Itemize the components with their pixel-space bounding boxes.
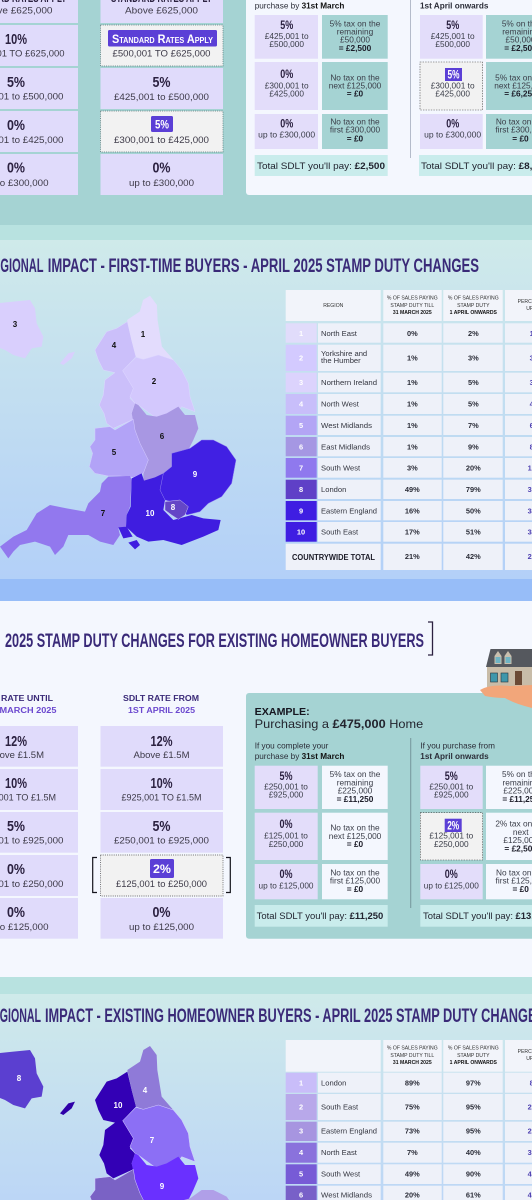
row text: 4 — [299, 1148, 304, 1157]
row text: 3% — [468, 354, 479, 362]
pill: standard rates apply: Standard Rates Apply — [112, 32, 214, 46]
row text: 3 — [299, 378, 303, 387]
row text: East Midlands — [321, 442, 370, 451]
row text: North East — [321, 329, 358, 338]
example column: from 1st April: 5% — [445, 769, 458, 783]
section background: homeowner rates — [0, 601, 532, 977]
example column: by 31st March: = £2,500 — [339, 43, 372, 53]
row text: South West — [321, 464, 361, 473]
example column: from 1st April: £925,000 — [434, 790, 469, 800]
row text: 51% — [466, 528, 481, 536]
example column: by 31st March: = £0 — [347, 884, 364, 894]
row text: 17% — [405, 528, 420, 536]
map labels: 9 — [160, 1182, 165, 1191]
rate column: first-time buyers from 1 April — [100, 0, 223, 195]
row text: 6 — [299, 442, 303, 451]
example column: by 31st March: = £0 — [347, 839, 364, 849]
row text: Northern Ireland — [321, 378, 377, 387]
table header: % OF SALES PAYING — [448, 1046, 499, 1052]
rate column: homeowners from 1 April: SDLT RATE FROM — [123, 693, 199, 703]
example column: by 31st March: first £300,000 — [330, 125, 381, 135]
example column: by 31st March: up to £125,000 — [258, 880, 314, 890]
rate column: homeowners until 31 March: 0% — [7, 904, 25, 921]
row text: 7 — [299, 464, 303, 473]
row text: 9% — [468, 442, 479, 451]
example column: by 31st March: 5% tax on the — [330, 769, 381, 779]
section divider band: blue — [0, 579, 532, 601]
row text: 61% — [466, 1190, 481, 1200]
example column: by 31st March: £300,001 to — [265, 80, 309, 90]
row text: 5 — [299, 421, 303, 430]
map: existing homeowners by region — [0, 1046, 236, 1200]
map labels: 7 — [150, 1136, 155, 1145]
example column: by 31st March: remaining — [337, 777, 374, 787]
rate column: homeowners until 31 March: 0% — [7, 861, 25, 878]
row text: 95% — [466, 1102, 481, 1112]
row text: 3 — [299, 1126, 303, 1136]
map labels: 4 — [112, 341, 117, 350]
rate column: homeowners from 1 April: £250,001 to £925,000 — [114, 836, 209, 846]
rows — [286, 1073, 532, 1200]
table header: REGION — [323, 303, 344, 309]
row text: 2 — [299, 354, 303, 362]
row text: 20% — [466, 464, 481, 473]
row text: 1% — [407, 354, 418, 362]
map labels: 10 — [146, 509, 155, 518]
rate column: first-time buyers until 31 March: 0% — [7, 117, 25, 134]
example column: from 1st April — [420, 742, 532, 927]
rate column: homeowners until 31 March: 10% — [5, 775, 27, 792]
rate column: first-time buyers from 1 April: Above £625,000 — [125, 6, 198, 16]
row text: Eastern England — [321, 1126, 377, 1136]
row text: 5% — [468, 400, 479, 409]
panel: homeowner example — [246, 693, 532, 939]
row text: West Midlands — [321, 1190, 372, 1200]
table header — [286, 290, 532, 321]
row text: 50% — [466, 506, 481, 515]
example column: by 31st March: £250,000 — [269, 839, 304, 849]
row text: 1% — [407, 421, 418, 430]
example column: by 31st March: £425,001 to — [265, 31, 309, 41]
row text: 0% — [407, 329, 418, 338]
table header: % OF SALES PAYING — [387, 296, 438, 302]
example column: from 1st April — [419, 2, 532, 176]
example column: from 1st April: 5% — [446, 18, 459, 32]
row text: 10 — [297, 528, 305, 536]
example column: from 1st April: next — [513, 827, 529, 837]
rate column: homeowners until 31 March: RATE UNTIL — [1, 693, 53, 703]
table: existing homeowners regional data — [286, 1040, 532, 1200]
example column: from 1st April: £250,001 to — [429, 781, 474, 791]
map labels: 2 — [152, 377, 157, 386]
example column: by 31st March: 0% — [280, 867, 293, 881]
rate column: first-time buyers from 1 April: 5% — [152, 74, 170, 91]
panel: first-time buyer example — [246, 0, 532, 195]
row text: 20% — [405, 1190, 420, 1200]
rate column: first-time buyers from 1 April: up to £300,000 — [129, 178, 194, 188]
row text: 49% — [405, 485, 420, 494]
map: first-time buyers by region — [0, 296, 236, 558]
row text: 1% — [407, 400, 418, 409]
row text: 75% — [405, 1102, 420, 1112]
section background: top teal band — [0, 0, 532, 225]
pill: 2%: 2% — [153, 862, 171, 876]
example column: from 1st April: £250,000 — [434, 839, 469, 849]
row text: COUNTRYWIDE TOTAL — [292, 553, 375, 562]
row text: the Humber — [321, 356, 361, 365]
row text: London — [321, 1078, 346, 1087]
section divider band — [0, 225, 532, 240]
map labels: 3 — [13, 320, 18, 329]
row text: 89% — [405, 1078, 420, 1087]
example column: by 31st March: = £11,250 — [337, 794, 374, 804]
example column: from 1st April: £425,000 — [435, 89, 470, 99]
row text: Yorkshire and — [321, 349, 367, 358]
row text: 1 — [299, 329, 303, 338]
row text: South West — [321, 1170, 361, 1178]
example column: from 1st April: up to £300,000 — [424, 129, 482, 139]
example column: by 31st March: purchase by 31st March — [255, 752, 344, 761]
example column: by 31st March: £250,001 to — [264, 781, 308, 791]
rate column: homeowners from 1 April: Above £1.5M — [134, 750, 190, 760]
example heading: EXAMPLE: — [255, 706, 310, 718]
example column: by 31st March: £50,000 — [340, 35, 370, 45]
rate column: first-time buyers until 31 March: 5% — [7, 74, 25, 91]
row text: South East — [321, 1102, 359, 1112]
example column: by 31st March: No tax on the — [330, 117, 380, 127]
table header: 31 MARCH 2025 — [393, 1060, 432, 1066]
table header: STAMP DUTY TILL — [390, 303, 434, 309]
row text: North West — [321, 400, 360, 409]
section divider band: teal — [0, 977, 532, 994]
example column: from 1st April: £300,001 to — [431, 80, 475, 90]
map labels: 1 — [141, 330, 146, 339]
rate column: first-time buyers until 31 March: 0% — [7, 160, 25, 176]
icon: house on a hand — [480, 649, 532, 708]
row text: London — [321, 485, 346, 494]
example column: from 1st April: 1st April onwards — [420, 752, 489, 761]
pill: 5%: 5% — [155, 118, 169, 132]
row text: 5% — [468, 378, 479, 387]
example column: from 1st April: £125,001 to — [429, 831, 474, 841]
table header: % OF SALES PAYING — [448, 296, 499, 302]
table header: % OF SALES PAYING — [387, 1046, 438, 1052]
example column: by 31st March: 0% — [280, 116, 293, 130]
row text: 16% — [405, 506, 420, 515]
rate column: homeowners from 1 April: 10% — [150, 775, 172, 792]
rate column: homeowners from 1 April: £925,001 TO £1.5M — [122, 792, 202, 802]
row text: 49% — [405, 1170, 420, 1178]
rate column: homeowners from 1 April: up to £125,000 — [129, 922, 194, 932]
map labels: 8 — [17, 1074, 22, 1083]
row text — [292, 329, 532, 562]
table header: 31 MARCH 2025 — [393, 310, 432, 316]
example heading — [255, 706, 424, 731]
heading bracket — [428, 622, 432, 655]
rate column: first-time buyers until 31 March: 10% — [5, 31, 27, 48]
example column: by 31st March: Total SDLT you'll pay: £11,250 — [257, 910, 383, 921]
row text: South East — [321, 528, 359, 536]
example column: by 31st March: 5% tax on the — [330, 19, 381, 29]
map labels: 8 — [171, 503, 176, 512]
row text: 2 — [299, 1102, 303, 1112]
example column: by 31st March — [255, 742, 388, 927]
example column: by 31st March: 0% — [280, 817, 293, 831]
highlight brackets — [93, 858, 230, 892]
example column: by 31st March: No tax on the — [330, 72, 380, 82]
example column: from 1st April: up to £125,000 — [424, 880, 479, 890]
example column: from 1st April: 0% — [445, 867, 458, 881]
rate column: homeowners until 31 March — [0, 693, 78, 939]
table header: STAMP DUTY TILL — [390, 1053, 434, 1059]
example column: from 1st April: = £0 — [513, 884, 529, 894]
example column: by 31st March: If you complete your — [255, 742, 329, 750]
rate column: homeowners until 31 March: 12% — [5, 733, 27, 750]
example column: by 31st March: = £0 — [347, 133, 364, 143]
map labels: 4 — [143, 1086, 148, 1095]
row text: 79% — [466, 485, 481, 494]
row text: 5 — [299, 1170, 303, 1178]
rate column: homeowners from 1 April: 5% — [152, 818, 170, 835]
row text — [299, 1078, 532, 1200]
table: first-time buyers regional data — [286, 290, 532, 570]
rate column: first-time buyers from 1 April: £500,001 TO £625,000 — [112, 48, 210, 58]
row text: 9 — [299, 506, 303, 515]
rate column: first-time buyers until 31 March — [0, 0, 78, 195]
row text: 1% — [407, 442, 418, 451]
example column: by 31st March: 5% — [280, 769, 293, 783]
rate column: first-time buyers from 1 April: £300,001 to £425,000 — [114, 135, 209, 145]
table header — [286, 1040, 532, 1072]
row text: 6 — [299, 1190, 303, 1200]
rate column: homeowners from 1 April: 1ST APRIL 2025 — [128, 705, 195, 715]
table header: STAMP DUTY — [457, 303, 490, 309]
example column: from 1st April: 1st April onwards — [420, 2, 489, 11]
row text: 40% — [466, 1148, 481, 1157]
rate column: homeowners until 31 March: 5% — [7, 818, 25, 835]
example column: by 31st March — [255, 2, 388, 176]
example column: by 31st March: first £125,000 — [330, 876, 381, 886]
map labels: 10 — [114, 1101, 123, 1110]
example column: by 31st March: No tax on the — [330, 867, 380, 877]
table header: 1 APRIL ONWARDS — [450, 1060, 498, 1066]
row text: 73% — [405, 1126, 420, 1136]
example column: by 31st March: £925,000 — [269, 790, 304, 800]
row text: 42% — [466, 552, 481, 561]
rows — [286, 323, 532, 570]
rate column: homeowners from 1 April: 0% — [152, 904, 170, 921]
example column: from 1st April: 0% — [446, 116, 459, 130]
example column: by 31st March: = £0 — [347, 89, 364, 99]
pill: 5% — [151, 116, 173, 132]
row text: Eastern England — [321, 506, 377, 515]
section background: homeowner regional gradient — [0, 994, 532, 1200]
pill: 2% — [150, 859, 174, 878]
section background: first-time buyers regional gradient — [0, 240, 532, 579]
pill: 2%: 2% — [447, 818, 459, 832]
rate column: homeowners until 31 March: MARCH 2025 — [0, 705, 57, 715]
row text: 1% — [407, 378, 418, 387]
row text: 7% — [407, 1148, 418, 1157]
row text: 1 — [299, 1078, 303, 1087]
rate column: homeowners from 1 April: £125,001 to £250,000 — [116, 879, 207, 889]
row text: 7% — [468, 421, 479, 430]
rate column: homeowners from 1 April: 12% — [150, 733, 172, 750]
example column: by 31st March: No tax on the — [330, 823, 380, 833]
example column: by 31st March: purchase by 31st March — [255, 2, 344, 11]
example column: from 1st April: If you purchase from — [420, 742, 495, 750]
example heading: Purchasing a £475,000 Home — [255, 717, 424, 731]
map labels: 7 — [101, 509, 106, 518]
map labels: 6 — [160, 432, 165, 441]
rate column: homeowners from 1 April — [93, 693, 230, 939]
example column: by 31st March: 0% — [280, 67, 293, 81]
example column: by 31st March: next £125,000 — [329, 80, 382, 90]
map labels: 9 — [193, 470, 198, 479]
example column: from 1st April: £425,001 to — [431, 31, 475, 41]
example column: from 1st April: = £0 — [512, 133, 529, 143]
rate column: first-time buyers from 1 April: £425,001 to £500,000 — [114, 92, 209, 102]
map labels — [17, 1074, 165, 1191]
example column: by 31st March: next £125,000 — [329, 831, 382, 841]
table header: STAMP DUTY — [457, 1053, 490, 1059]
example column: by 31st March: £500,000 — [269, 39, 304, 49]
rate column: first-time buyers from 1 April: 0% — [152, 160, 170, 176]
example column: by 31st March: £125,001 to — [264, 831, 308, 841]
row text: 97% — [466, 1078, 481, 1087]
row text: 21% — [405, 552, 420, 561]
pill: 5%: 5% — [448, 68, 460, 82]
example column: from 1st April: £500,000 — [435, 39, 470, 49]
example column: by 31st March: remaining — [337, 27, 374, 37]
example column: by 31st March: Total SDLT you'll pay: £2,500 — [257, 160, 385, 171]
row text: West Midlands — [321, 421, 372, 430]
map labels: 5 — [112, 448, 117, 457]
example column: by 31st March: £225,000 — [338, 786, 373, 796]
map labels — [13, 320, 198, 518]
row text: 95% — [466, 1126, 481, 1136]
row text: 2% — [468, 329, 479, 338]
example column: by 31st March: 5% — [280, 18, 293, 32]
row text: 8 — [299, 485, 303, 494]
table header: 1 APRIL ONWARDS — [450, 310, 498, 316]
example column: by 31st March: £425,000 — [269, 89, 304, 99]
row text: 90% — [466, 1170, 481, 1178]
row text: North East — [321, 1148, 358, 1157]
row text: 3% — [407, 464, 418, 473]
row text: 4 — [299, 400, 304, 409]
example column: by 31st March: up to £300,000 — [258, 129, 316, 139]
